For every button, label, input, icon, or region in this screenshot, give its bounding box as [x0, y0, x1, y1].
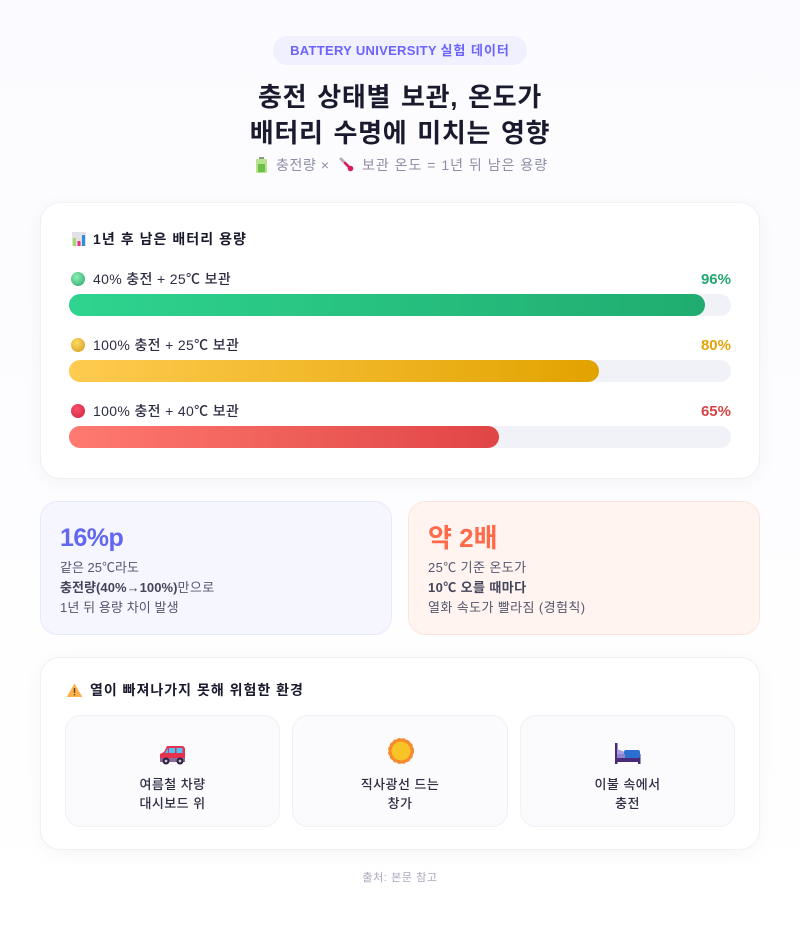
row 3 value: 65%: [701, 403, 731, 420]
label: [361, 777, 439, 811]
row 2 bar: [69, 360, 731, 382]
stat value: 약 2배: [428, 523, 498, 553]
stat description: [428, 560, 585, 615]
stat description: 충전량(40%→100%)만으로: [60, 580, 215, 595]
icon: car: [160, 746, 185, 764]
stat card: 16%p: [40, 501, 392, 635]
stat description: [60, 560, 215, 615]
icon: warning: [67, 684, 82, 697]
label: [594, 777, 661, 811]
icon: bar chart: [72, 232, 86, 246]
source footer: 출처: 본문 참고: [362, 872, 438, 884]
row 1 bar: [69, 294, 731, 316]
label: 창가: [388, 796, 412, 811]
row 2 icon: yellow dot: [71, 338, 85, 352]
label: 여름철 차량: [139, 777, 206, 792]
stat description: 25℃ 기준 온도가: [428, 560, 526, 575]
subtitle: 충전량 ×: [276, 157, 330, 173]
header badge: [273, 36, 527, 65]
subtitle: 보관 온도 = 1년 뒤 남은 용량: [362, 157, 548, 173]
label: 이불 속에서: [594, 777, 661, 792]
card: sunny window: [292, 715, 508, 827]
card: car dashboard: [65, 715, 280, 827]
title: 배터리 수명에 미치는 영향: [250, 118, 550, 148]
panel heading: 열이 빠져나가지 못해 위험한 환경: [90, 682, 304, 698]
header badge: BATTERY UNIVERSITY 실험 데이터: [290, 43, 510, 58]
subtitle: [256, 157, 548, 173]
panel heading: 1년 후 남은 배터리 용량: [93, 231, 247, 247]
row 1 value: 96%: [701, 271, 731, 288]
label: [139, 777, 206, 811]
icon: thermometer: [340, 157, 354, 172]
row 2 value: 80%: [701, 337, 731, 354]
row 2 label: 100% 충전 + 25℃ 보관: [93, 337, 239, 353]
card: under blanket: [520, 715, 735, 827]
panel: remaining capacity: [40, 202, 760, 479]
label: 대시보드 위: [139, 796, 206, 811]
row 1 label: 40% 충전 + 25℃ 보관: [93, 271, 231, 287]
stat description: 열화 속도가 빨라짐 (경험칙): [428, 600, 585, 615]
panel: dangerous environments: [40, 657, 760, 850]
title: [250, 82, 550, 148]
title: 충전 상태별 보관, 온도가: [258, 82, 542, 112]
stat card: about double: [408, 501, 760, 635]
row 1 icon: green dot: [71, 272, 85, 286]
stat description: 10℃ 오를 때마다: [428, 580, 526, 595]
label: 직사광선 드는: [361, 777, 439, 792]
icon: sun: [388, 738, 414, 764]
stat value: 16%p: [60, 524, 123, 552]
stat description: 같은 25℃라도: [60, 560, 139, 575]
label: 충전: [615, 796, 640, 811]
stat description: 1년 뒤 용량 차이 발생: [60, 600, 179, 615]
row 3 bar: [69, 426, 731, 448]
icon: bed: [615, 743, 640, 764]
row 3 label: 100% 충전 + 40℃ 보관: [93, 403, 239, 419]
icon: battery: [256, 157, 267, 173]
row 3 icon: red dot: [71, 404, 85, 418]
